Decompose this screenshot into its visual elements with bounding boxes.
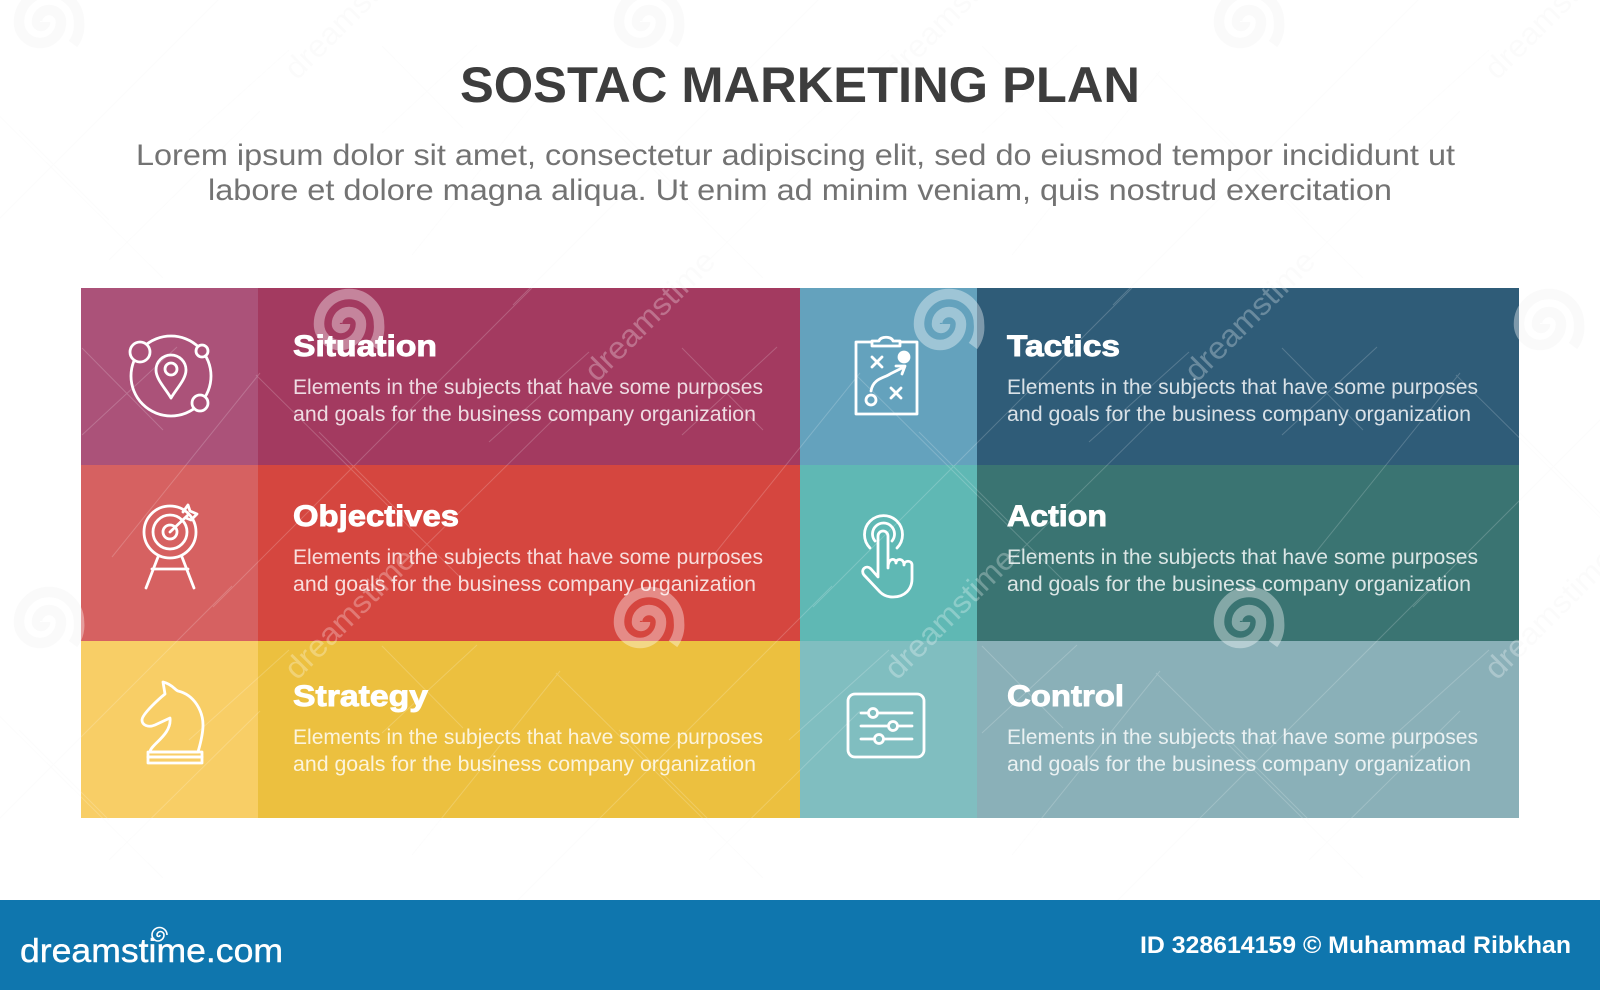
watermark on white background: dreamstime <box>277 541 422 686</box>
title: SOSTAC MARKETING PLAN <box>460 57 1140 113</box>
watermark over panels: dreamstime <box>277 541 422 686</box>
panel: control <box>848 680 1478 776</box>
footer logo: dreamstime.com <box>20 932 283 969</box>
icon: clipboard with play diagram <box>856 337 917 414</box>
description: situation <box>293 375 763 426</box>
subtitle text: labore et dolore magna aliqua. Ut enim ad minim veniam, quis nostrud exercitation <box>208 174 1392 207</box>
description: tactics: Elements in the subjects that have some purposes <box>1007 375 1478 399</box>
description: objectives: and goals for the business company organization <box>293 572 756 596</box>
heading: control: Control <box>1007 680 1124 713</box>
panel: objectives <box>144 500 763 596</box>
description: objectives: Elements in the subjects that have some purposes <box>293 545 763 569</box>
description: action <box>1007 545 1478 596</box>
description: situation: and goals for the business company organization <box>293 402 756 426</box>
heading: tactics: Tactics <box>1007 330 1120 363</box>
watermark over panels <box>81 288 1519 818</box>
description: action: Elements in the subjects that have some purposes <box>1007 545 1478 569</box>
watermark over panels: dreamstime <box>1177 243 1322 388</box>
watermark over panels: dreamstime <box>877 541 1022 686</box>
heading: objectives: Objectives <box>293 500 459 533</box>
footer credit: ID 328614159 © Muhammad Ribkhan <box>1140 932 1571 959</box>
description: control: and goals for the business company organization <box>1007 752 1471 776</box>
description: action: and goals for the business company organization <box>1007 572 1471 596</box>
heading: situation: Situation <box>293 330 437 363</box>
description: tactics: and goals for the business company organization <box>1007 402 1471 426</box>
subtitle text: Lorem ipsum dolor sit amet, consectetur adipiscing elit, sed do eiusmod tempor incididunt ut <box>136 139 1456 172</box>
icon: orbit with location pin <box>130 336 211 416</box>
subtitle text <box>136 139 1456 207</box>
panel backgrounds: six-cell grid <box>81 288 1519 818</box>
description: control <box>1007 725 1478 776</box>
panel: strategy <box>142 680 763 776</box>
watermark over panels: dreamstime <box>577 243 722 388</box>
description: strategy <box>293 725 763 776</box>
footer bar <box>0 900 1600 990</box>
description: control: Elements in the subjects that have some purposes <box>1007 725 1478 749</box>
panel: tactics <box>856 330 1478 426</box>
icon: sliders <box>848 694 924 757</box>
description: situation: Elements in the subjects that have some purposes <box>293 375 763 399</box>
panel: situation <box>130 330 763 426</box>
description: strategy: Elements in the subjects that have some purposes <box>293 725 763 749</box>
heading: strategy: Strategy <box>293 680 428 713</box>
panel: action <box>863 500 1478 597</box>
description: strategy: and goals for the business company organization <box>293 752 756 776</box>
description: tactics <box>1007 375 1478 426</box>
heading: action: Action <box>1007 500 1107 533</box>
icon: chess knight <box>142 682 203 763</box>
description: objectives <box>293 545 763 596</box>
icon: finger tapping <box>863 516 912 597</box>
watermark on white background: dreamstime <box>577 243 722 388</box>
icon: target with arrow on stand <box>144 505 197 588</box>
watermark on white background: dreamstime <box>1177 243 1322 388</box>
